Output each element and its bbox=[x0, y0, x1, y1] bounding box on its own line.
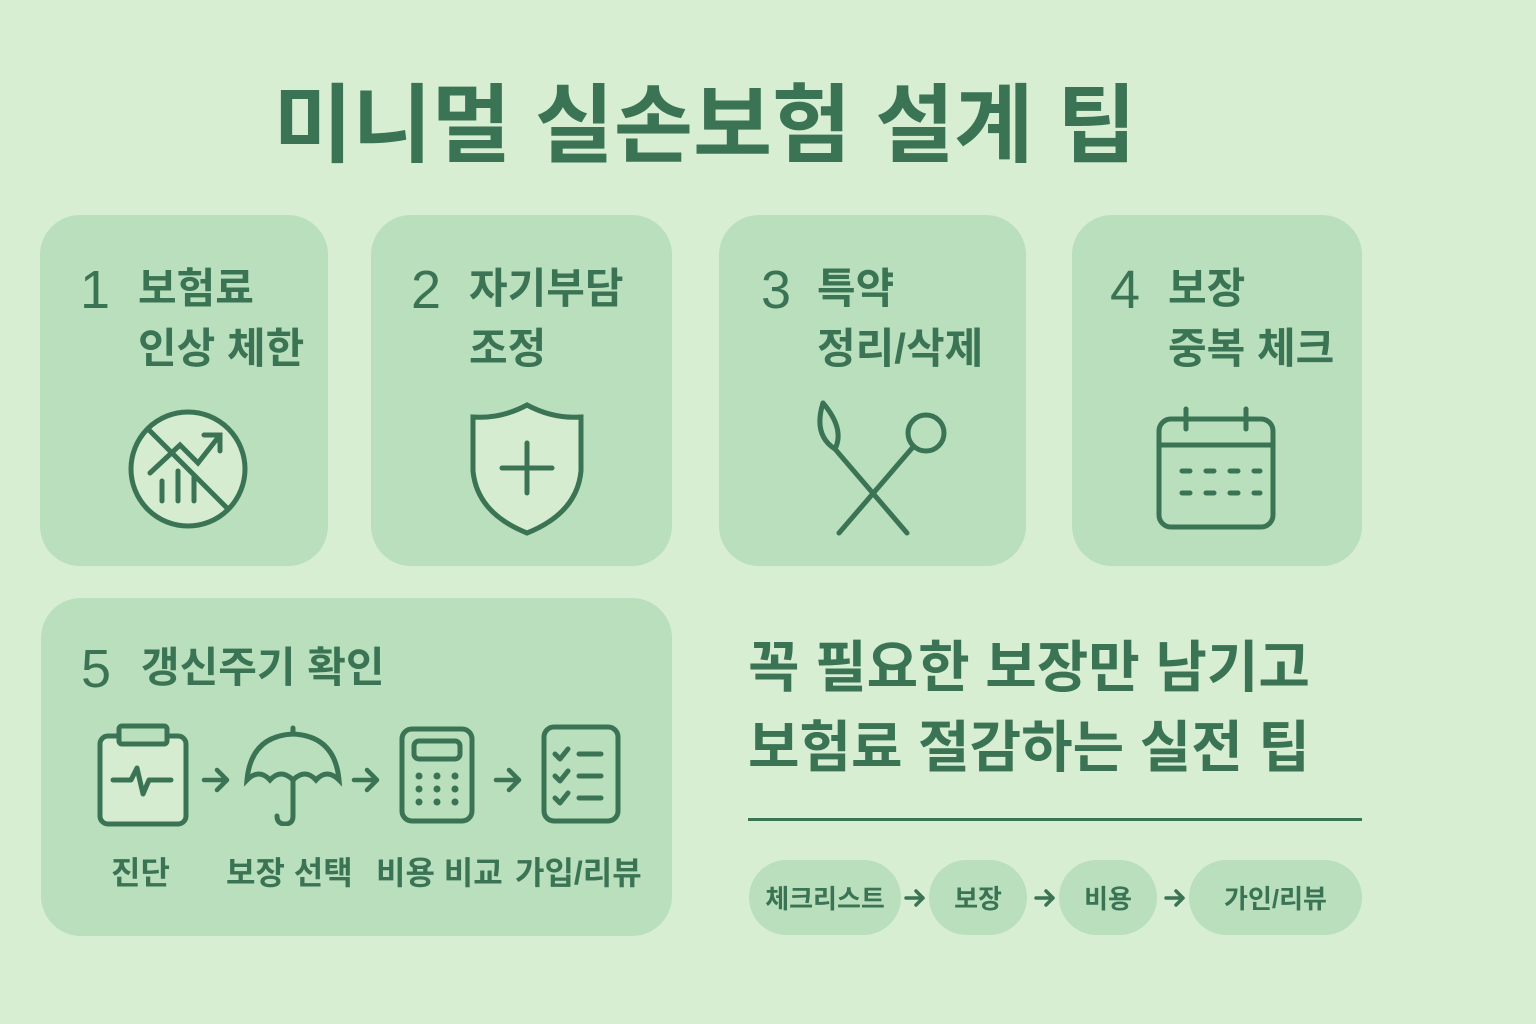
label 2 bbox=[469, 265, 624, 372]
icon: no rising chart bbox=[128, 410, 248, 528]
icon: shield bbox=[470, 402, 584, 536]
icon: scissors bbox=[817, 400, 946, 536]
label 4 bbox=[1168, 265, 1334, 372]
pill: coverage: 보장 bbox=[954, 884, 1002, 914]
tagline bbox=[748, 636, 1310, 779]
label 4: 보장 bbox=[1168, 265, 1245, 312]
pill: coverage bbox=[929, 860, 1027, 935]
tagline: 꼭 필요한 보장만 남기고 bbox=[748, 636, 1310, 699]
panel: card 5 bbox=[41, 598, 672, 936]
step labels: 보장 선택 bbox=[226, 855, 353, 891]
number 1: 1 bbox=[80, 260, 110, 320]
number 5: 5 bbox=[81, 639, 111, 699]
arrow bbox=[494, 768, 522, 792]
pill: checklist bbox=[749, 860, 901, 935]
number 4: 4 bbox=[1110, 260, 1140, 320]
label 3: 특약 bbox=[817, 265, 894, 312]
label 2: 조정 bbox=[469, 325, 546, 372]
icon: calendar bbox=[1156, 406, 1276, 530]
icon: calculator bbox=[400, 726, 474, 824]
pill: join/review: 가인/리뷰 bbox=[1224, 884, 1327, 914]
arrow bbox=[1034, 889, 1055, 907]
label 4: 중복 체크 bbox=[1168, 325, 1334, 372]
pill: checklist: 체크리스트 bbox=[765, 884, 885, 914]
title: 미니멀 실손보험 설계 팁 bbox=[274, 78, 1136, 174]
panel: card 4 bbox=[1072, 215, 1362, 566]
step labels: 비용 비교 bbox=[376, 855, 503, 891]
panel: card 3 bbox=[719, 215, 1026, 566]
pill: join/review bbox=[1189, 860, 1362, 935]
label 3: 정리/삭제 bbox=[817, 325, 983, 372]
step labels: 가입/리뷰 bbox=[515, 855, 642, 891]
arrow bbox=[202, 768, 230, 792]
label 3 bbox=[817, 265, 983, 372]
number 3: 3 bbox=[761, 260, 791, 320]
label 1 bbox=[138, 265, 304, 372]
step labels: 진단 bbox=[111, 855, 170, 891]
tagline: 보험료 절감하는 실전 팁 bbox=[748, 716, 1310, 779]
step labels bbox=[111, 855, 642, 891]
label 5: 갱신주기 확인 bbox=[141, 644, 385, 691]
icon: clipboard bbox=[98, 724, 188, 826]
arrow bbox=[352, 768, 380, 792]
pill: cost: 비용 bbox=[1084, 884, 1132, 914]
label 2: 자기부담 bbox=[469, 265, 624, 312]
icon: checklist bbox=[542, 724, 620, 824]
label 1: 보험료 bbox=[138, 265, 254, 312]
panel: card 1 bbox=[40, 215, 328, 566]
arrow bbox=[904, 889, 925, 907]
pill: cost bbox=[1059, 860, 1157, 935]
arrow bbox=[1164, 889, 1185, 907]
panel: card 2 bbox=[371, 215, 672, 566]
label 1: 인상 체한 bbox=[138, 325, 304, 372]
number 2: 2 bbox=[411, 260, 441, 320]
icon: umbrella bbox=[244, 726, 342, 826]
